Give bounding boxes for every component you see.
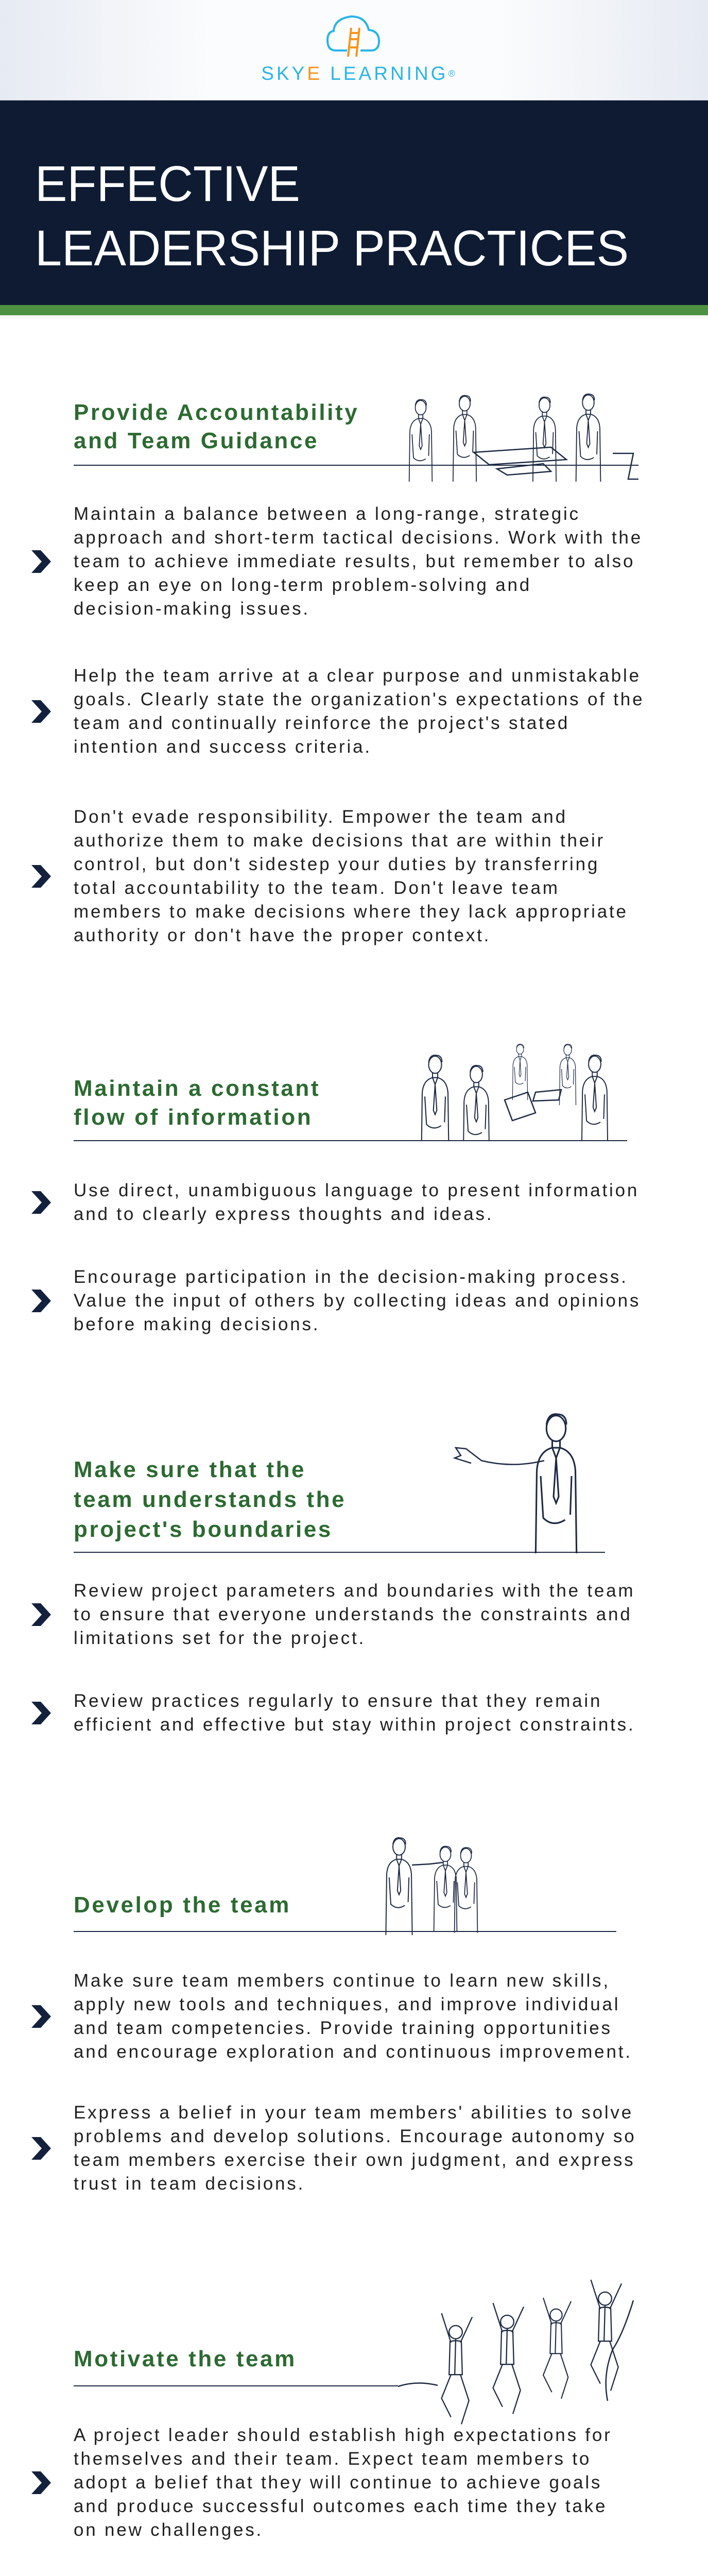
text: approach and short-term tactical decisions. Work with the	[74, 528, 643, 548]
bullet 1	[31, 504, 643, 619]
text	[74, 666, 644, 757]
title: LEADERSHIP PRACTICES	[35, 220, 629, 276]
panel: motivate the team	[0, 2267, 708, 2576]
bullet 2	[31, 2103, 636, 2194]
text: team and continually reinforce the project's stated	[74, 713, 569, 733]
icon: chevron	[31, 2471, 52, 2494]
heading	[74, 1076, 320, 1130]
text: and encourage exploration and continuous improvement.	[74, 2042, 632, 2062]
bullet 2	[31, 1267, 641, 1334]
panel: provide accountability	[31, 394, 644, 945]
illustration: presenter pointing	[453, 1413, 578, 1553]
text: Review project parameters and boundaries with the team	[74, 1581, 635, 1601]
heading: Motivate the team	[74, 2346, 297, 2371]
icon: chevron	[31, 550, 51, 573]
heading: and Team Guidance	[74, 428, 319, 453]
icon: chevron	[31, 2137, 51, 2160]
heading	[74, 1457, 346, 1542]
icon: cloud with ladder logo	[326, 15, 380, 57]
text	[74, 1971, 632, 2062]
text: A project leader should establish high expectations for	[74, 2425, 612, 2445]
illustration: group discussion	[421, 1044, 608, 1140]
text: on new challenges.	[74, 2520, 263, 2540]
text	[74, 504, 643, 619]
text	[74, 1581, 635, 1648]
heading: Make sure that the	[74, 1457, 306, 1482]
text: Help the team arrive at a clear purpose and unmistakable	[74, 666, 641, 686]
text: team members exercise their own judgment, and express	[74, 2150, 635, 2170]
text: and to clearly express thoughts and ideas.	[74, 1204, 493, 1224]
text: apply new tools and techniques, and improve individual	[74, 1994, 620, 2014]
text: Review practices regularly to ensure that they remain	[74, 1691, 602, 1711]
text: and team competencies. Provide training opportunities	[74, 2018, 612, 2038]
text: Value the input of others by collecting ideas and opinions	[74, 1291, 641, 1311]
text: decision-making issues.	[74, 599, 310, 619]
text	[74, 1180, 639, 1224]
bullet 3	[31, 807, 628, 945]
header band	[0, 0, 708, 100]
bullet 1	[0, 2424, 708, 2542]
rule	[74, 1931, 616, 1932]
panel: develop the team	[31, 1837, 636, 2194]
icon: chevron	[31, 2005, 51, 2028]
bullet 2	[31, 666, 644, 757]
heading	[74, 400, 359, 453]
rule	[74, 465, 638, 466]
text: Encourage participation in the decision-making process.	[74, 1267, 628, 1287]
text	[74, 2424, 612, 2542]
title	[35, 156, 629, 276]
text: Express a belief in your team members' abilities to solve	[74, 2103, 633, 2123]
text: problems and develop solutions. Encourage autonomy so	[74, 2126, 636, 2146]
text: and produce successful outcomes each time they take	[74, 2496, 607, 2516]
icon: chevron	[31, 865, 51, 888]
text: Make sure team members continue to learn new skills,	[74, 1971, 610, 1991]
bullet 1	[31, 1180, 639, 1224]
icon: chevron	[31, 1702, 51, 1724]
text: before making decisions.	[74, 1314, 320, 1334]
text	[74, 2101, 636, 2196]
text: themselves and their team. Expect team members to	[74, 2449, 591, 2469]
panel: project boundaries	[31, 1413, 635, 1735]
heading: flow of information	[74, 1105, 313, 1130]
icon: chevron	[31, 1290, 51, 1312]
icon: chevron	[31, 1603, 51, 1626]
text: members to make decisions where they lack appropriate	[74, 902, 628, 922]
heading: Provide Accountability	[74, 400, 359, 425]
heading: Develop the team	[74, 1892, 291, 1918]
icon: chevron	[31, 700, 51, 723]
title banner	[0, 100, 708, 305]
heading: project's boundaries	[74, 1517, 333, 1542]
text: authorize them to make decisions that are within their	[74, 831, 605, 851]
title: EFFECTIVE	[35, 156, 300, 212]
text: to ensure that everyone understands the constraints and	[74, 1604, 632, 1624]
rule	[74, 1552, 605, 1553]
text	[74, 1267, 641, 1334]
rule	[74, 2385, 398, 2386]
text: limitations set for the project.	[74, 1628, 366, 1648]
text: trust in team decisions.	[74, 2174, 305, 2194]
text: authority or don't have the proper context.	[74, 925, 491, 945]
illustration: team meeting	[409, 394, 638, 482]
text: Don't evade responsibility. Empower the team and	[74, 807, 567, 827]
text: control, but don't sidestep your duties by transferring	[74, 854, 599, 874]
panel: constant flow of information	[31, 1044, 641, 1334]
icon: chevron	[31, 1191, 51, 1214]
text: adopt a belief that they will continue to achieve goals	[74, 2472, 602, 2493]
bullet 1	[31, 1581, 635, 1648]
rule	[74, 1140, 627, 1141]
text: efficient and effective but stay within project constraints.	[74, 1715, 635, 1735]
text: intention and success criteria.	[74, 737, 372, 757]
logo text: SKYE LEARNING®	[261, 63, 458, 84]
illustration: handshake	[385, 1837, 478, 1935]
bullet 2	[31, 1691, 635, 1735]
bullet 1	[31, 1971, 632, 2062]
text: team to achieve immediate results, but remember to also	[74, 551, 635, 571]
text: goals. Clearly state the organization's expectations of the	[74, 689, 644, 709]
text: keep an eye on long-term problem-solving and	[74, 575, 531, 595]
text	[74, 1691, 635, 1735]
text	[74, 807, 628, 945]
text: total accountability to the team. Don't leave team	[74, 878, 560, 898]
text: Use direct, unambiguous language to present information	[74, 1180, 639, 1200]
text: Maintain a balance between a long-range, strategic	[74, 504, 580, 524]
green stripe	[0, 305, 708, 315]
heading: team understands the	[74, 1487, 346, 1512]
illustration: jumping team	[396, 2272, 664, 2437]
heading: Maintain a constant	[74, 1076, 320, 1101]
